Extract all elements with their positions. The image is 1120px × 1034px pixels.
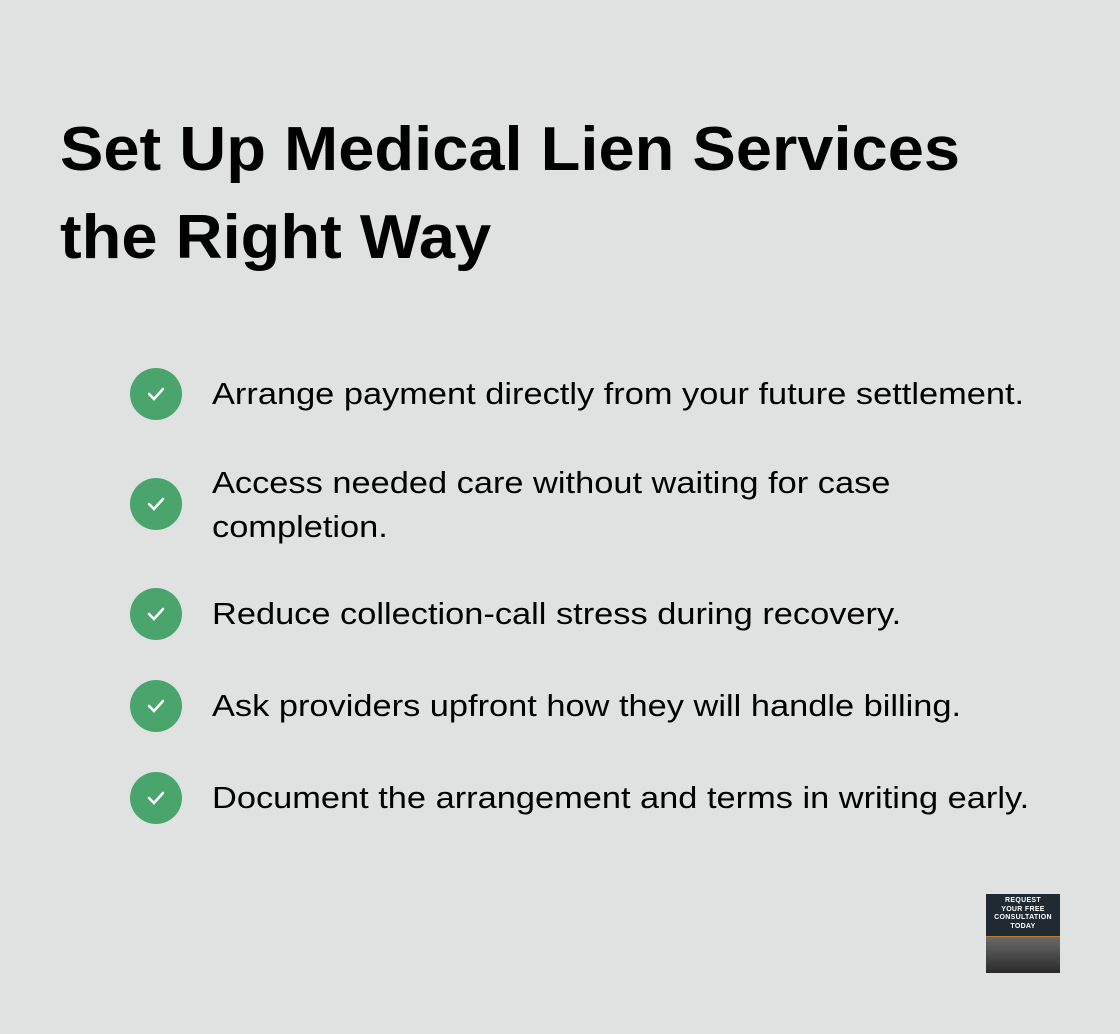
title: the Right Way [60,203,491,272]
text 2: completion. [212,509,388,544]
item 2 [130,465,890,544]
item 3 [130,588,901,640]
item 1 [130,368,1024,420]
icon: check [130,680,182,732]
icon: check [130,588,182,640]
item 5 [130,772,1029,824]
text 5: Document the arrangement and terms in writing early. [212,780,1029,815]
title: Set Up Medical Lien Services [60,115,960,184]
text 3: Reduce collection-call stress during recovery. [212,596,901,631]
logo: consultation badge: CONSULTATION [994,914,1052,921]
icon: check [130,368,182,420]
text 4: Ask providers upfront how they will handle billing. [212,688,961,723]
item 4 [130,680,961,732]
icon: check [130,478,182,530]
logo: consultation badge: YOUR FREE [1001,906,1045,912]
title [60,115,960,272]
logo: consultation badge: TODAY [1010,922,1036,930]
text 2: Access needed care without waiting for case [212,465,890,500]
logo: consultation badge [986,894,1060,973]
text 2 [212,465,890,544]
text 1: Arrange payment directly from your future settlement. [212,376,1024,411]
logo: consultation badge: REQUEST [1005,897,1041,904]
icon: check [130,772,182,824]
